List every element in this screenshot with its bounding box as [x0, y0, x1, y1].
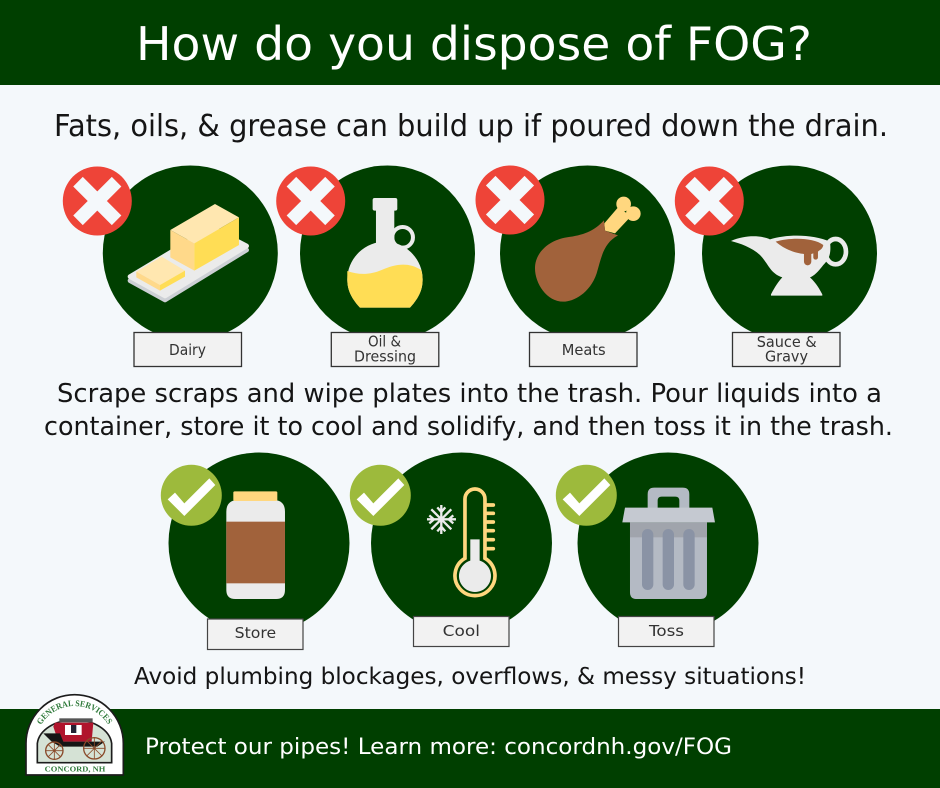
icon: green check badge [556, 465, 617, 526]
icon: red X badge [63, 166, 132, 236]
label: cool [414, 616, 509, 646]
label: toss [618, 616, 714, 646]
label: store: Store [235, 624, 276, 642]
label: meats [530, 332, 637, 366]
panel: sauce and gravy [675, 166, 877, 366]
panel: toss [556, 452, 758, 646]
icon: red X badge [476, 166, 544, 234]
subtitle: Fats, oils, & grease can build up if poured down the drain. [54, 109, 888, 144]
logo: General Services Concord NH stagecoach: CONCORD, NH [45, 764, 106, 773]
instructions text: Scrape scraps and wipe plates into the trash. Pour liquids into a [57, 379, 882, 409]
label: sauce and gravy: Sauce & [757, 333, 817, 351]
label: oil and dressing [331, 332, 439, 366]
icon: red X badge [675, 166, 744, 236]
label: cool: Cool [443, 622, 480, 640]
footer banner [0, 709, 940, 788]
instructions text: container, store it to cool and solidify, and then toss it in the trash. [44, 412, 893, 442]
icon: red X badge [276, 166, 345, 236]
panel: dairy [63, 166, 278, 366]
label: oil and dressing: Dressing [354, 348, 416, 366]
label: toss: Toss [648, 622, 684, 640]
closing message: Avoid plumbing blockages, overflows, & messy situations! [134, 664, 806, 690]
icon: trash can [622, 488, 715, 599]
panel: cool [350, 452, 552, 646]
panel: store [161, 452, 350, 650]
panel: meats [476, 166, 675, 366]
icon: gravy boat [731, 236, 846, 296]
footer banner: Protect our pipes! Learn more: concordnh.gov/FOG [145, 734, 732, 760]
label: dairy [134, 332, 242, 366]
panel: oil and dressing [276, 166, 475, 366]
title banner [0, 0, 940, 85]
label: dairy: Dairy [169, 341, 206, 359]
label: oil and dressing: Oil & [368, 332, 401, 350]
instructions text [44, 379, 893, 442]
label: sauce and gravy [732, 332, 840, 366]
icon: thermometer and snowflake [427, 489, 495, 596]
icon: oil bottle [347, 198, 423, 308]
logo: General Services Concord NH stagecoach: GENERAL SERVICES [38, 700, 112, 724]
icon: green check badge [161, 465, 222, 526]
logo: General Services Concord NH stagecoach [25, 694, 124, 776]
icon: green check badge [350, 465, 411, 526]
icon: drumstick [535, 197, 641, 302]
label: store [208, 619, 303, 650]
label: meats: Meats [562, 341, 606, 359]
label: sauce and gravy: Gravy [765, 348, 808, 366]
title banner: How do you dispose of FOG? [136, 17, 812, 71]
icon: jar [226, 491, 285, 599]
icon: butter on tray [130, 204, 247, 300]
